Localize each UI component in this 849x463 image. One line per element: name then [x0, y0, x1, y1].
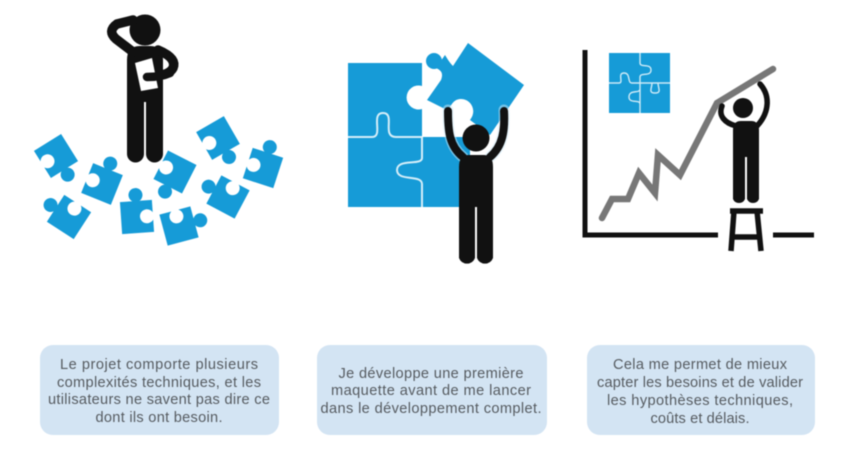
icon: person with raised arms [448, 110, 504, 264]
icon: completed puzzle [609, 53, 670, 113]
text box: step 2: Je développe une première [338, 366, 524, 382]
icon: person pushing the line up [721, 84, 767, 203]
icon: person scratching head holding a paper [112, 14, 174, 162]
text box: step 1: dont ils ont besoin. [96, 410, 222, 426]
chart line [602, 69, 773, 218]
panel: puzzle assembly [348, 43, 524, 264]
text box: step 3: Cela me permet de mieux [613, 357, 788, 373]
icon: stool [730, 211, 763, 251]
text box: step 3 [587, 345, 815, 435]
text box: step 3: les hypothèses techniques, [607, 393, 793, 409]
text box: step 2 [317, 345, 547, 435]
panel: rising chart [585, 50, 814, 251]
text box: step 1: complexités techniques, et les [57, 375, 261, 391]
text box: step 2: dans le développement complet. [320, 401, 542, 417]
chart axes [585, 50, 814, 235]
text box: step 1 [40, 345, 279, 435]
text box: step 1: Le projet comporte plusieurs [60, 357, 258, 373]
text box: step 3: capter les besoins et de valider [597, 375, 803, 391]
icon: floating puzzle piece [426, 43, 524, 135]
icon: scattered puzzle pieces [34, 116, 287, 246]
icon: assembled puzzle pieces [348, 63, 470, 207]
panel: scattered puzzle pieces and puzzled person [34, 14, 287, 246]
text box: step 1: utilisateurs ne savent pas dire ce [48, 392, 270, 408]
text box: step 3: coûts et délais. [650, 411, 750, 427]
text box: step 2: maquette avant de me lancer [331, 383, 531, 399]
